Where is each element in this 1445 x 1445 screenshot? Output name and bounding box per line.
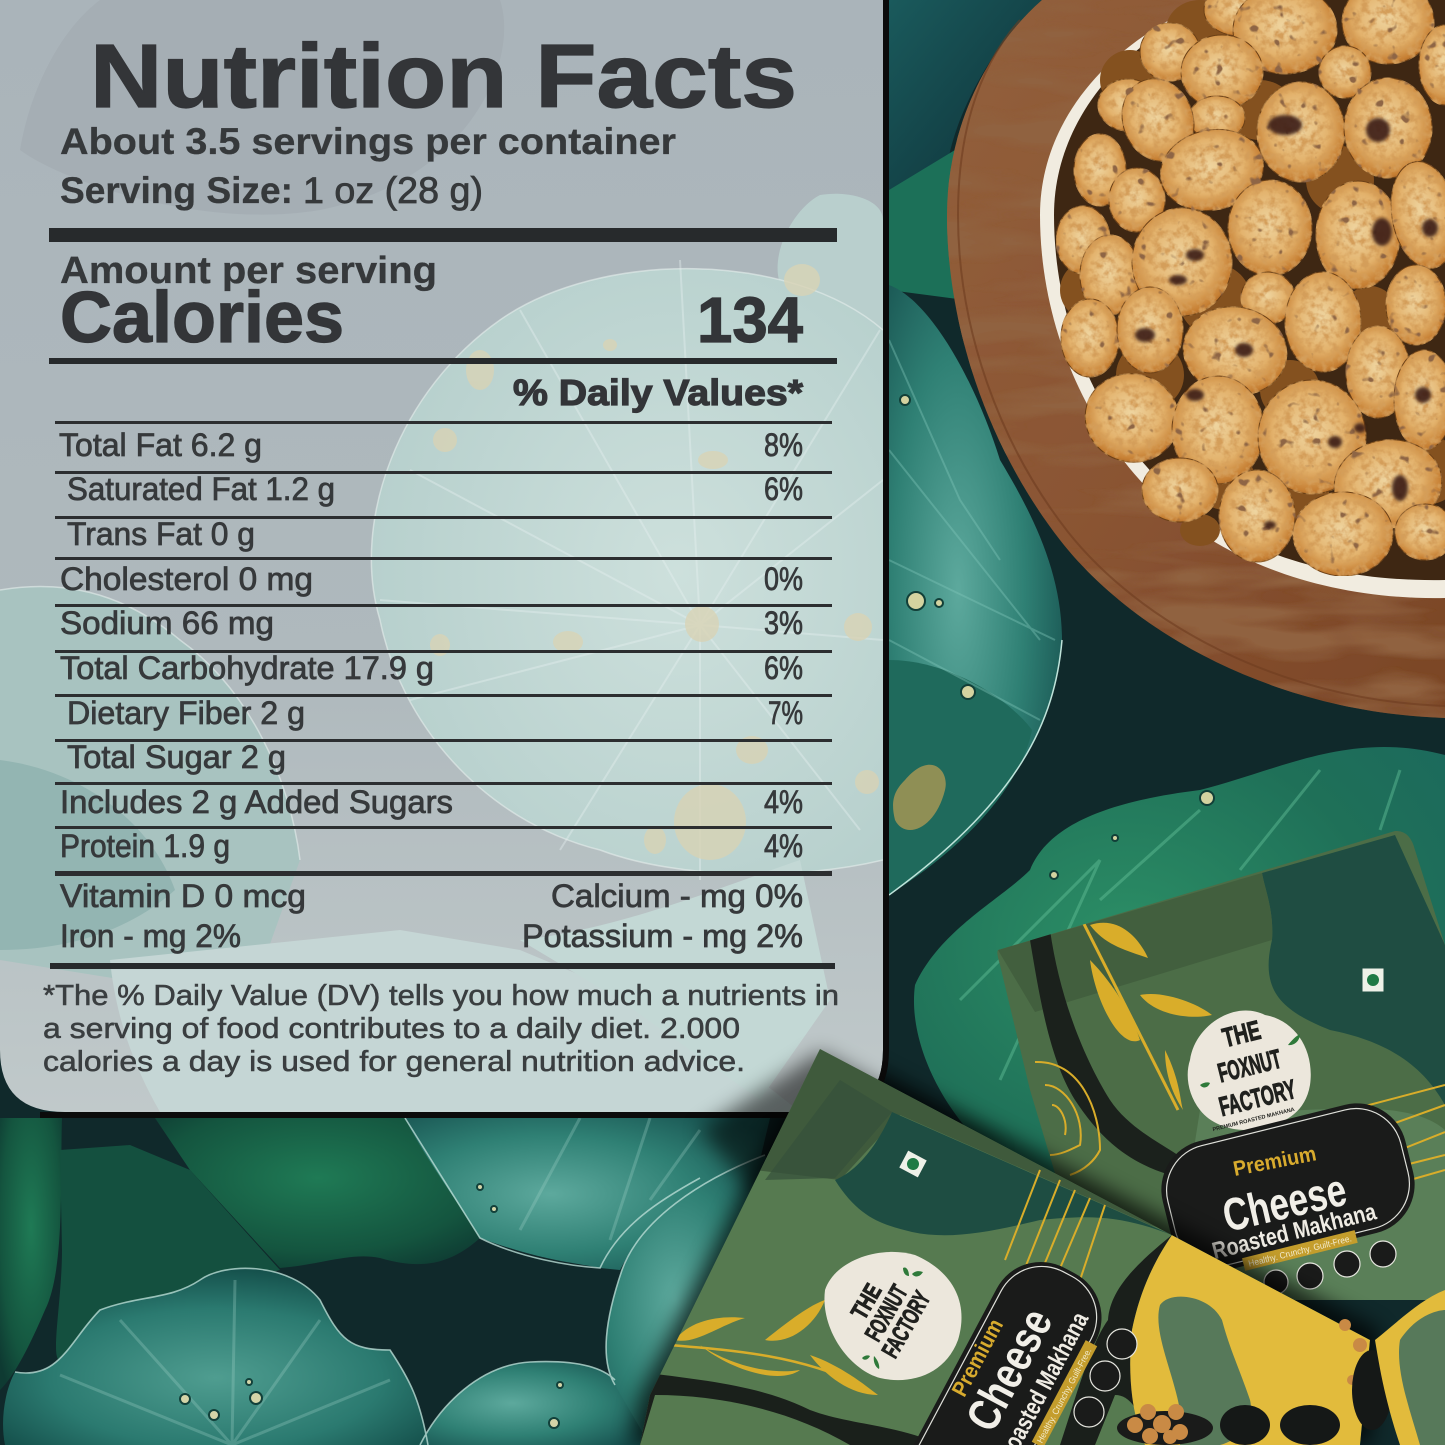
front snack pouch (640, 1049, 1445, 1445)
vitamins and minerals: Potassium - mg 2% (522, 918, 803, 954)
footnote: *The % Daily Value (DV) tells you how much a nutrients in (43, 980, 839, 1012)
nutrient table: 7% (768, 695, 803, 731)
back snack pouch (997, 831, 1445, 1300)
right side lily leaves (889, 0, 1445, 1190)
wooden plate (947, 0, 1445, 718)
large green leaf behind the packs (914, 747, 1445, 1190)
vitamins and minerals: Calcium - mg 0% (551, 878, 803, 914)
logo sticker: PREMIUM ROASTED MAKHANA (1212, 1107, 1295, 1133)
servings per container: About 3.5 servings per container (60, 121, 676, 162)
vitamins and minerals: Iron - mg 2% (60, 918, 241, 954)
serving size: 1 oz (28 g) (303, 170, 483, 211)
water drops (180, 1184, 563, 1428)
white bowl (1040, 0, 1445, 598)
nut char spots (1135, 115, 1438, 529)
nutrient table: Total Sugar 2 g (67, 739, 286, 775)
window of nuts (1117, 1319, 1376, 1445)
logo sticker (824, 1252, 961, 1380)
nutrient table: 6% (764, 650, 803, 686)
product label capsule (882, 1244, 1119, 1445)
black wave beside the label (1060, 1235, 1172, 1445)
serving size: Serving Size: (60, 170, 293, 211)
product label capsule: Roasted Makhana (1209, 1198, 1379, 1265)
benefit badges (1074, 1329, 1137, 1427)
product label capsule: Cheese (955, 1300, 1062, 1439)
front pouch drop shadow (630, 1040, 1380, 1445)
product label capsule: Healthy. Crunchy. Guilt-Free. (1035, 1346, 1093, 1445)
vitamins and minerals: Vitamin D 0 mcg (60, 878, 306, 914)
footnote: a serving of food contributes to a daily diet. 2.000 (43, 1013, 740, 1045)
product label capsule: Premium (947, 1315, 1008, 1400)
title: Nutrition Facts (90, 27, 797, 127)
logo sticker: FACTORY (877, 1287, 936, 1363)
logo sticker: FOXNUT (1215, 1044, 1284, 1088)
benefit badges on back pouch (1264, 1241, 1396, 1294)
nutrient table: Total Carbohydrate 17.9 g (60, 650, 434, 686)
nutrient table: Trans Fat 0 g (67, 516, 255, 552)
nutrition facts panel (0, 0, 886, 1115)
logo sticker: THE (1219, 1015, 1264, 1053)
nutrient table: 4% (764, 828, 803, 864)
nutrient table: Dietary Fiber 2 g (67, 695, 305, 731)
nutrient table: Includes 2 g Added Sugars (60, 784, 453, 820)
filler nuts at the back of the bowl (1060, 0, 1445, 546)
front pouch shadow over panel (700, 1052, 1000, 1200)
dark shadows at the bottom right (1220, 1350, 1445, 1445)
nutrient table: Sodium 66 mg (60, 605, 274, 641)
product label capsule: Cheese (1218, 1163, 1351, 1242)
panel backdrop and faint leaves (0, 0, 883, 1112)
nutrient table: 0% (764, 561, 803, 597)
amount per serving: Amount per serving (60, 250, 437, 292)
logo sticker (1188, 1010, 1311, 1133)
nutrient table: Cholesterol 0 mg (60, 561, 313, 597)
calories value: 134 (697, 284, 803, 356)
nutrient table: Saturated Fat 1.2 g (67, 471, 335, 507)
yellow back panel (1130, 1235, 1370, 1445)
logo sticker: THE (846, 1279, 887, 1324)
nutrient table: Protein 1.9 g (60, 828, 230, 864)
vitamins and minerals (60, 878, 803, 954)
FSSAI veg mark (1362, 968, 1384, 992)
nutrient table (55, 421, 832, 876)
serving size (60, 170, 483, 211)
nutrient table: Total Fat 6.2 g (59, 427, 262, 463)
product label capsule (1151, 1093, 1425, 1281)
nutrient table: 8% (764, 427, 803, 463)
nutrient table: 4% (764, 784, 803, 820)
footnote: calories a day is used for general nutrition advice. (43, 1046, 745, 1078)
FSSAI veg mark (899, 1150, 927, 1178)
bottom-left lily leaves (0, 1118, 780, 1445)
logo sticker: FOXNUT (860, 1280, 913, 1346)
product label capsule: Healthy. Crunchy. Guilt-Free. (1247, 1233, 1353, 1269)
roasted makhana in the bowl (1056, 0, 1445, 576)
logo sticker: FACTORY (1216, 1074, 1299, 1122)
product label capsule: Premium (1231, 1142, 1318, 1181)
panel black border (40, 0, 886, 1115)
calories heading: Calories (60, 278, 344, 358)
nutrient table: 6% (764, 471, 803, 507)
nutrient table: 3% (764, 605, 803, 641)
footnote (43, 980, 839, 1078)
daily values heading: % Daily Values* (513, 372, 803, 413)
